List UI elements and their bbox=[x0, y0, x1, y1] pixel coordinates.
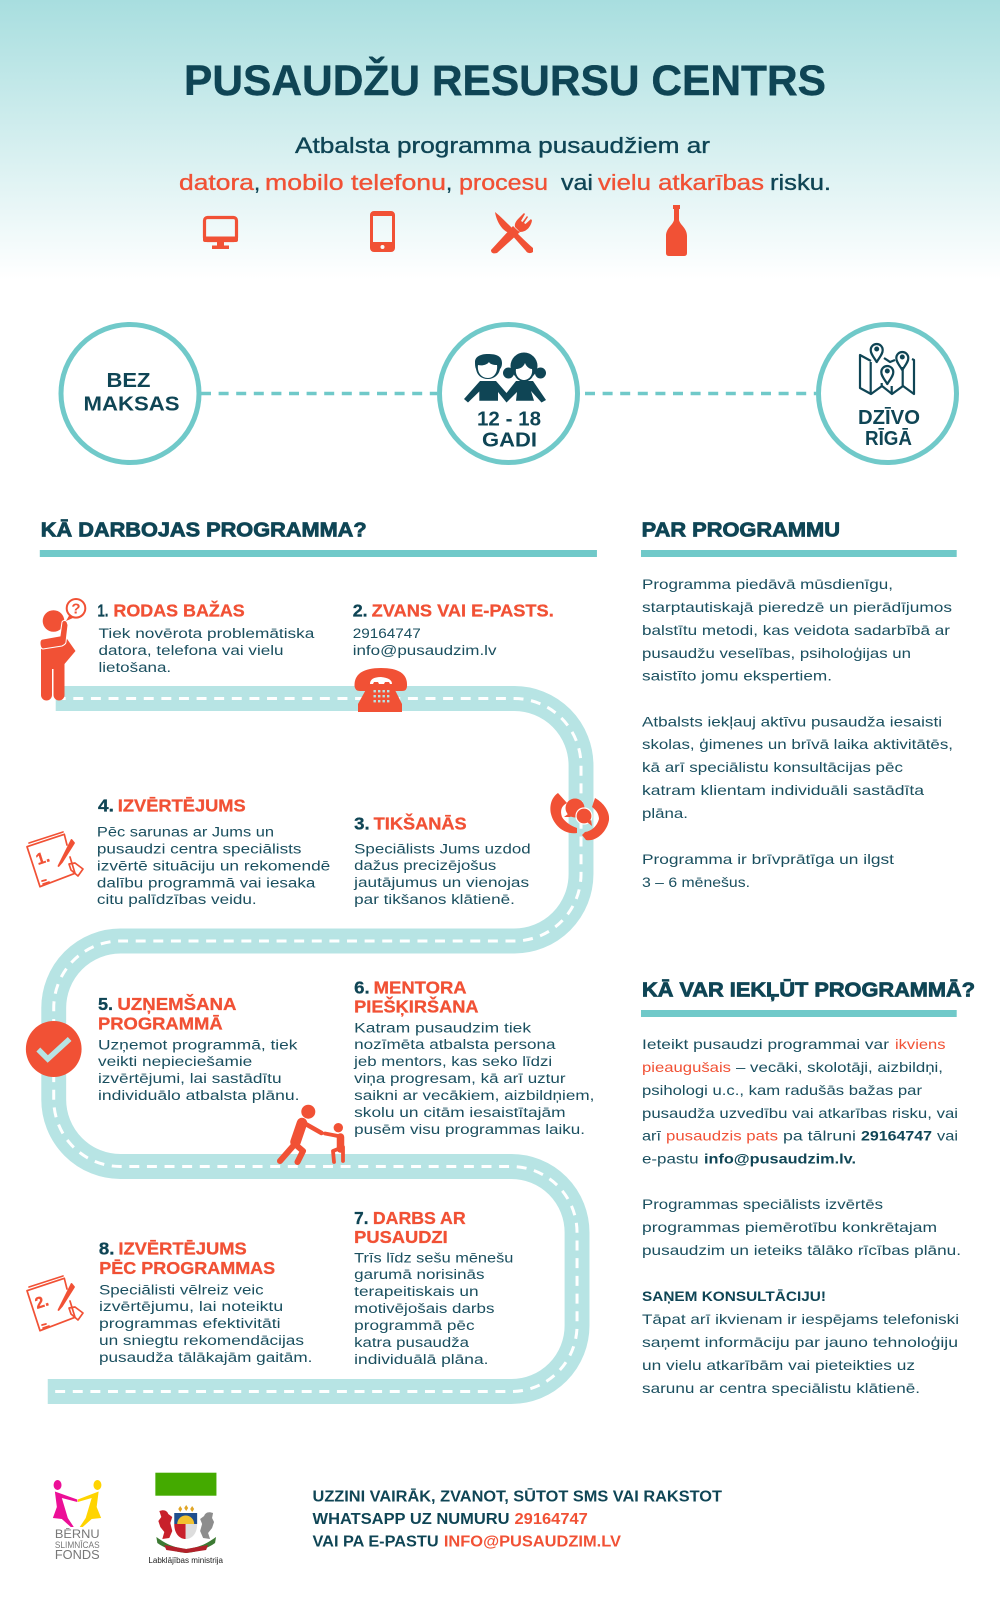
icon: adult helping child bbox=[280, 1105, 343, 1162]
icon: notepad 2: 2. bbox=[33, 1293, 51, 1313]
join text: – vecāki, skolotāji, aizbildņi, bbox=[736, 1059, 943, 1075]
subtitle: , bbox=[446, 170, 452, 195]
step 2: 2. bbox=[353, 601, 368, 621]
about text: katram klientam individuāli sastādīta bbox=[642, 782, 924, 798]
step 4: IZVĒRTĒJUMS bbox=[118, 796, 246, 816]
step 7: garumā norisinās bbox=[354, 1266, 485, 1282]
logo: Labklājības ministrija bbox=[148, 1473, 224, 1565]
join text: e-pastu bbox=[642, 1150, 698, 1166]
step 4: 4. bbox=[98, 796, 114, 816]
step 7: katra pusaudža bbox=[354, 1334, 469, 1350]
step 8 bbox=[27, 1239, 312, 1365]
step 6: PIEŠĶIRŠANA bbox=[354, 995, 479, 1016]
about text: Programma piedāvā mūsdienīgu, bbox=[642, 576, 893, 592]
step 6 bbox=[280, 977, 594, 1162]
about text: pusaudžu veselības, psiholoģijas un bbox=[642, 645, 911, 661]
join text: pusaudzis pats bbox=[666, 1128, 778, 1144]
step 5: 5. bbox=[98, 994, 113, 1014]
subtitle: , bbox=[254, 170, 260, 195]
panel: about the programme bbox=[641, 520, 957, 890]
join text: vai bbox=[937, 1128, 958, 1144]
join text: Tāpat arī ikvienam ir iespējams telefoniski bbox=[642, 1311, 959, 1327]
icon: notepad 1: 1. bbox=[34, 849, 52, 869]
icon: knife and fork bbox=[491, 212, 533, 253]
about text: Programma ir brīvprātīga un ilgst bbox=[642, 851, 894, 867]
step 2: 29164747 bbox=[353, 625, 421, 641]
step 1: datora, telefona vai vielu bbox=[98, 642, 284, 658]
step 4: pusaudzi centra speciālists bbox=[97, 840, 301, 857]
step 5 bbox=[26, 993, 299, 1103]
subtitle: vai bbox=[561, 170, 593, 195]
join text: SAŅEM KONSULTĀCIJU! bbox=[642, 1288, 826, 1304]
join text: info@pusaudzim.lv. bbox=[704, 1150, 856, 1166]
step 8: Speciālisti vēlreiz veic bbox=[99, 1281, 264, 1297]
join text: arī bbox=[642, 1128, 661, 1144]
step 5: UZŅEMŠANA bbox=[117, 993, 237, 1014]
join text: ikviens bbox=[895, 1036, 946, 1052]
join text: pa tālruni bbox=[783, 1128, 856, 1144]
step 6: viņa progresam, kā arī uztur bbox=[354, 1070, 566, 1086]
join text: pieaugušais bbox=[642, 1059, 731, 1075]
icon: mobile phone bbox=[370, 211, 395, 252]
heading: about: PAR PROGRAMMU bbox=[642, 520, 840, 542]
icon: check mark circle bbox=[26, 1021, 82, 1077]
subtitle: vielu atkarības bbox=[598, 170, 764, 195]
step 3: TIKŠANĀS bbox=[374, 812, 467, 833]
step 6: 6. bbox=[354, 977, 370, 997]
step 8: PĒC PROGRAMMAS bbox=[99, 1258, 275, 1278]
step 2 bbox=[353, 601, 554, 712]
join text: Ieteikt pusaudzi programmai var bbox=[642, 1036, 889, 1052]
header background bbox=[0, 0, 1000, 280]
step 7 bbox=[354, 1208, 513, 1367]
subtitle: procesu bbox=[459, 170, 548, 195]
icon: rotary telephone bbox=[354, 668, 407, 712]
about text: saistīto jomu ekspertiem. bbox=[642, 668, 832, 684]
step 7: programmā pēc bbox=[354, 1317, 475, 1333]
icon: two children bbox=[464, 352, 546, 402]
step 5: individuālo atbalsta plānu. bbox=[98, 1087, 299, 1103]
contact call to action: UZZINI VAIRĀK, ZVANOT, SŪTOT SMS VAI RAKSTOT bbox=[313, 1487, 722, 1506]
circle: age group: GADI bbox=[482, 430, 537, 452]
circle: bez maksas: MAKSAS bbox=[84, 394, 180, 416]
step 7: terapeitiskais un bbox=[354, 1283, 479, 1299]
join text: pusaudža uzvedību vai atkarības risku, vai bbox=[642, 1105, 958, 1121]
road path bbox=[48, 698, 581, 1392]
step 5: Uzņemot programmā, tiek bbox=[98, 1036, 298, 1052]
step 1: lietošana. bbox=[98, 659, 171, 675]
step 3 bbox=[353, 793, 609, 907]
circle: bez maksas: BEZ bbox=[106, 370, 150, 392]
step 8: IZVĒRTĒJUMS bbox=[118, 1239, 247, 1259]
step 4: izvērtē situāciju un rekomendē bbox=[97, 857, 331, 874]
join text: pusaudzim un ieteiks tālāko rīcības plānu. bbox=[642, 1242, 961, 1258]
panel: how to join bbox=[641, 980, 975, 1396]
step 6: pusēm visu programmas laiku. bbox=[354, 1121, 585, 1137]
about text: 3 – 6 mēnešus. bbox=[642, 874, 750, 890]
icon: notepad 1 bbox=[27, 832, 83, 887]
step 8: izvērtējumu, lai noteiktu bbox=[99, 1298, 283, 1314]
icon: thinking person: ? bbox=[71, 600, 81, 617]
join text: Programmas speciālists izvērtēs bbox=[642, 1196, 883, 1212]
about text: kā arī speciālistu konsultācijas pēc bbox=[642, 759, 903, 775]
step 7: PUSAUDZI bbox=[354, 1227, 448, 1247]
about text: Atbalsts iekļauj aktīvu pusaudža iesaisti bbox=[642, 714, 942, 730]
step 5: veikti nepieciešamie bbox=[98, 1053, 253, 1069]
circle: bez maksas bbox=[61, 324, 199, 462]
contact call to action: 29164747 bbox=[515, 1511, 588, 1528]
step 4: citu palīdzības veidu. bbox=[97, 891, 257, 907]
dashed connector bbox=[201, 392, 816, 395]
step 1: 1. bbox=[98, 601, 108, 621]
logo: Bērnu slimnīcas fonds: BĒRNU bbox=[55, 1527, 100, 1541]
join text: programmas piemērotību konkrētajam bbox=[642, 1219, 937, 1235]
icon: monitor bbox=[203, 218, 238, 249]
step 3: dažus precizējošus bbox=[354, 857, 496, 873]
contact call to action bbox=[313, 1487, 722, 1551]
step 5: izvērtējumi, lai sastādītu bbox=[98, 1070, 282, 1086]
about text: starptautiskajā pieredzē un pierādījumos bbox=[642, 599, 952, 615]
step 5: PROGRAMMĀ bbox=[98, 1013, 223, 1033]
step 6: Katram pusaudzim tiek bbox=[354, 1019, 531, 1035]
step 4: Pēc sarunas ar Jums un bbox=[97, 824, 274, 840]
step 6: skolu un citām iesaistītajām bbox=[354, 1104, 566, 1120]
subtitle: risku. bbox=[770, 170, 831, 195]
step 3: Speciālists Jums uzdod bbox=[354, 840, 531, 856]
heading: how to join: KĀ VAR IEKĻŪT PROGRAMMĀ? bbox=[642, 980, 975, 1002]
contact call to action: WHATSAPP UZ NUMURU bbox=[313, 1511, 510, 1528]
step 7: Trīs līdz sešu mēnešu bbox=[354, 1249, 513, 1265]
step 6: nozīmēta atbalsta persona bbox=[354, 1036, 556, 1052]
subtitle: Atbalsta programma pusaudžiem ar bbox=[295, 133, 710, 158]
icon: thinking person bbox=[40, 599, 85, 700]
heading: how the programme works bbox=[40, 520, 597, 557]
step 7: individuālā plāna. bbox=[354, 1351, 488, 1367]
contact call to action: INFO@PUSAUDZIM.LV bbox=[444, 1534, 621, 1551]
step 2: info@pusaudzim.lv bbox=[353, 642, 496, 658]
icon: notepad 2 bbox=[27, 1276, 83, 1331]
title: PUSAUDŽU RESURSU CENTRS bbox=[184, 56, 826, 105]
about text: skolas, ģimenes un brīvā laika aktivitātēs, bbox=[642, 736, 953, 752]
circle: location bbox=[818, 324, 956, 462]
step 7: 7. bbox=[354, 1208, 369, 1228]
step 8: un sniegtu rekomendācijas bbox=[99, 1332, 304, 1348]
join text: psihologi u.c., kam radušās bažas par bbox=[642, 1082, 922, 1098]
step 3: jautājumus un vienojas bbox=[353, 874, 529, 890]
join text bbox=[642, 1036, 961, 1396]
step 7: motivējošais darbs bbox=[354, 1300, 494, 1316]
circle: location: DZĪVO bbox=[858, 407, 920, 429]
step 6: MENTORA bbox=[374, 977, 467, 997]
about text: plāna. bbox=[642, 805, 688, 821]
subtitle bbox=[179, 133, 831, 195]
circle: age group: 12 - 18 bbox=[477, 409, 541, 431]
logo: Labklājības ministrija: Labklājības ministrija bbox=[148, 1556, 224, 1565]
logo: Bērnu slimnīcas fonds: SLIMNĪCAS bbox=[55, 1540, 100, 1550]
coat of arms bbox=[156, 1505, 216, 1553]
join text: un vielu atkarībām vai pieteikties uz bbox=[642, 1357, 915, 1373]
step 7: DARBS AR bbox=[373, 1208, 466, 1228]
step 3: 3. bbox=[354, 813, 370, 833]
subtitle: mobilo telefonu bbox=[265, 170, 446, 195]
heading: how the programme works: KĀ DARBOJAS PROGRAMMA? bbox=[41, 520, 367, 542]
icon: handsets and speech bubbles bbox=[550, 793, 609, 840]
subtitle: datora bbox=[179, 170, 255, 195]
step 3: par tikšanos klātienē. bbox=[354, 891, 515, 907]
circle: location: RĪGĀ bbox=[865, 428, 912, 450]
about text: balstītu metodi, kas veidota sadarbībā ar bbox=[642, 622, 950, 638]
step 2: ZVANS VAI E-PASTS. bbox=[372, 601, 554, 621]
logo: Bērnu slimnīcas fonds bbox=[53, 1480, 101, 1562]
step 4: dalību programmā vai iesaka bbox=[97, 874, 316, 890]
circle: age group bbox=[440, 324, 578, 462]
logo: Bērnu slimnīcas fonds: FONDS bbox=[55, 1547, 100, 1562]
join text: sarunu ar centra speciālistu klātienē. bbox=[642, 1380, 920, 1396]
step 1: Tiek novērota problemātiska bbox=[98, 625, 315, 641]
contact call to action: VAI PA E-PASTU bbox=[313, 1534, 439, 1551]
step 1: RODAS BAŽAS bbox=[113, 600, 245, 621]
join text: 29164747 bbox=[861, 1128, 932, 1144]
icon: bottle bbox=[666, 205, 687, 256]
step 6: jeb mentors, kas seko līdzi bbox=[353, 1053, 552, 1069]
step 8: pusaudža tālākajām gaitām. bbox=[99, 1349, 312, 1365]
join text: saņemt informāciju par jauno tehnoloģiju bbox=[642, 1334, 958, 1350]
about text bbox=[642, 576, 953, 890]
step 8: 8. bbox=[99, 1239, 114, 1259]
step 8: programmas efektivitāti bbox=[99, 1315, 281, 1331]
step 6: saikni ar vecākiem, aizbildņiem, bbox=[354, 1087, 594, 1103]
step 4 bbox=[27, 796, 331, 907]
icon: map with pins bbox=[860, 344, 914, 394]
step 1 bbox=[40, 599, 315, 700]
